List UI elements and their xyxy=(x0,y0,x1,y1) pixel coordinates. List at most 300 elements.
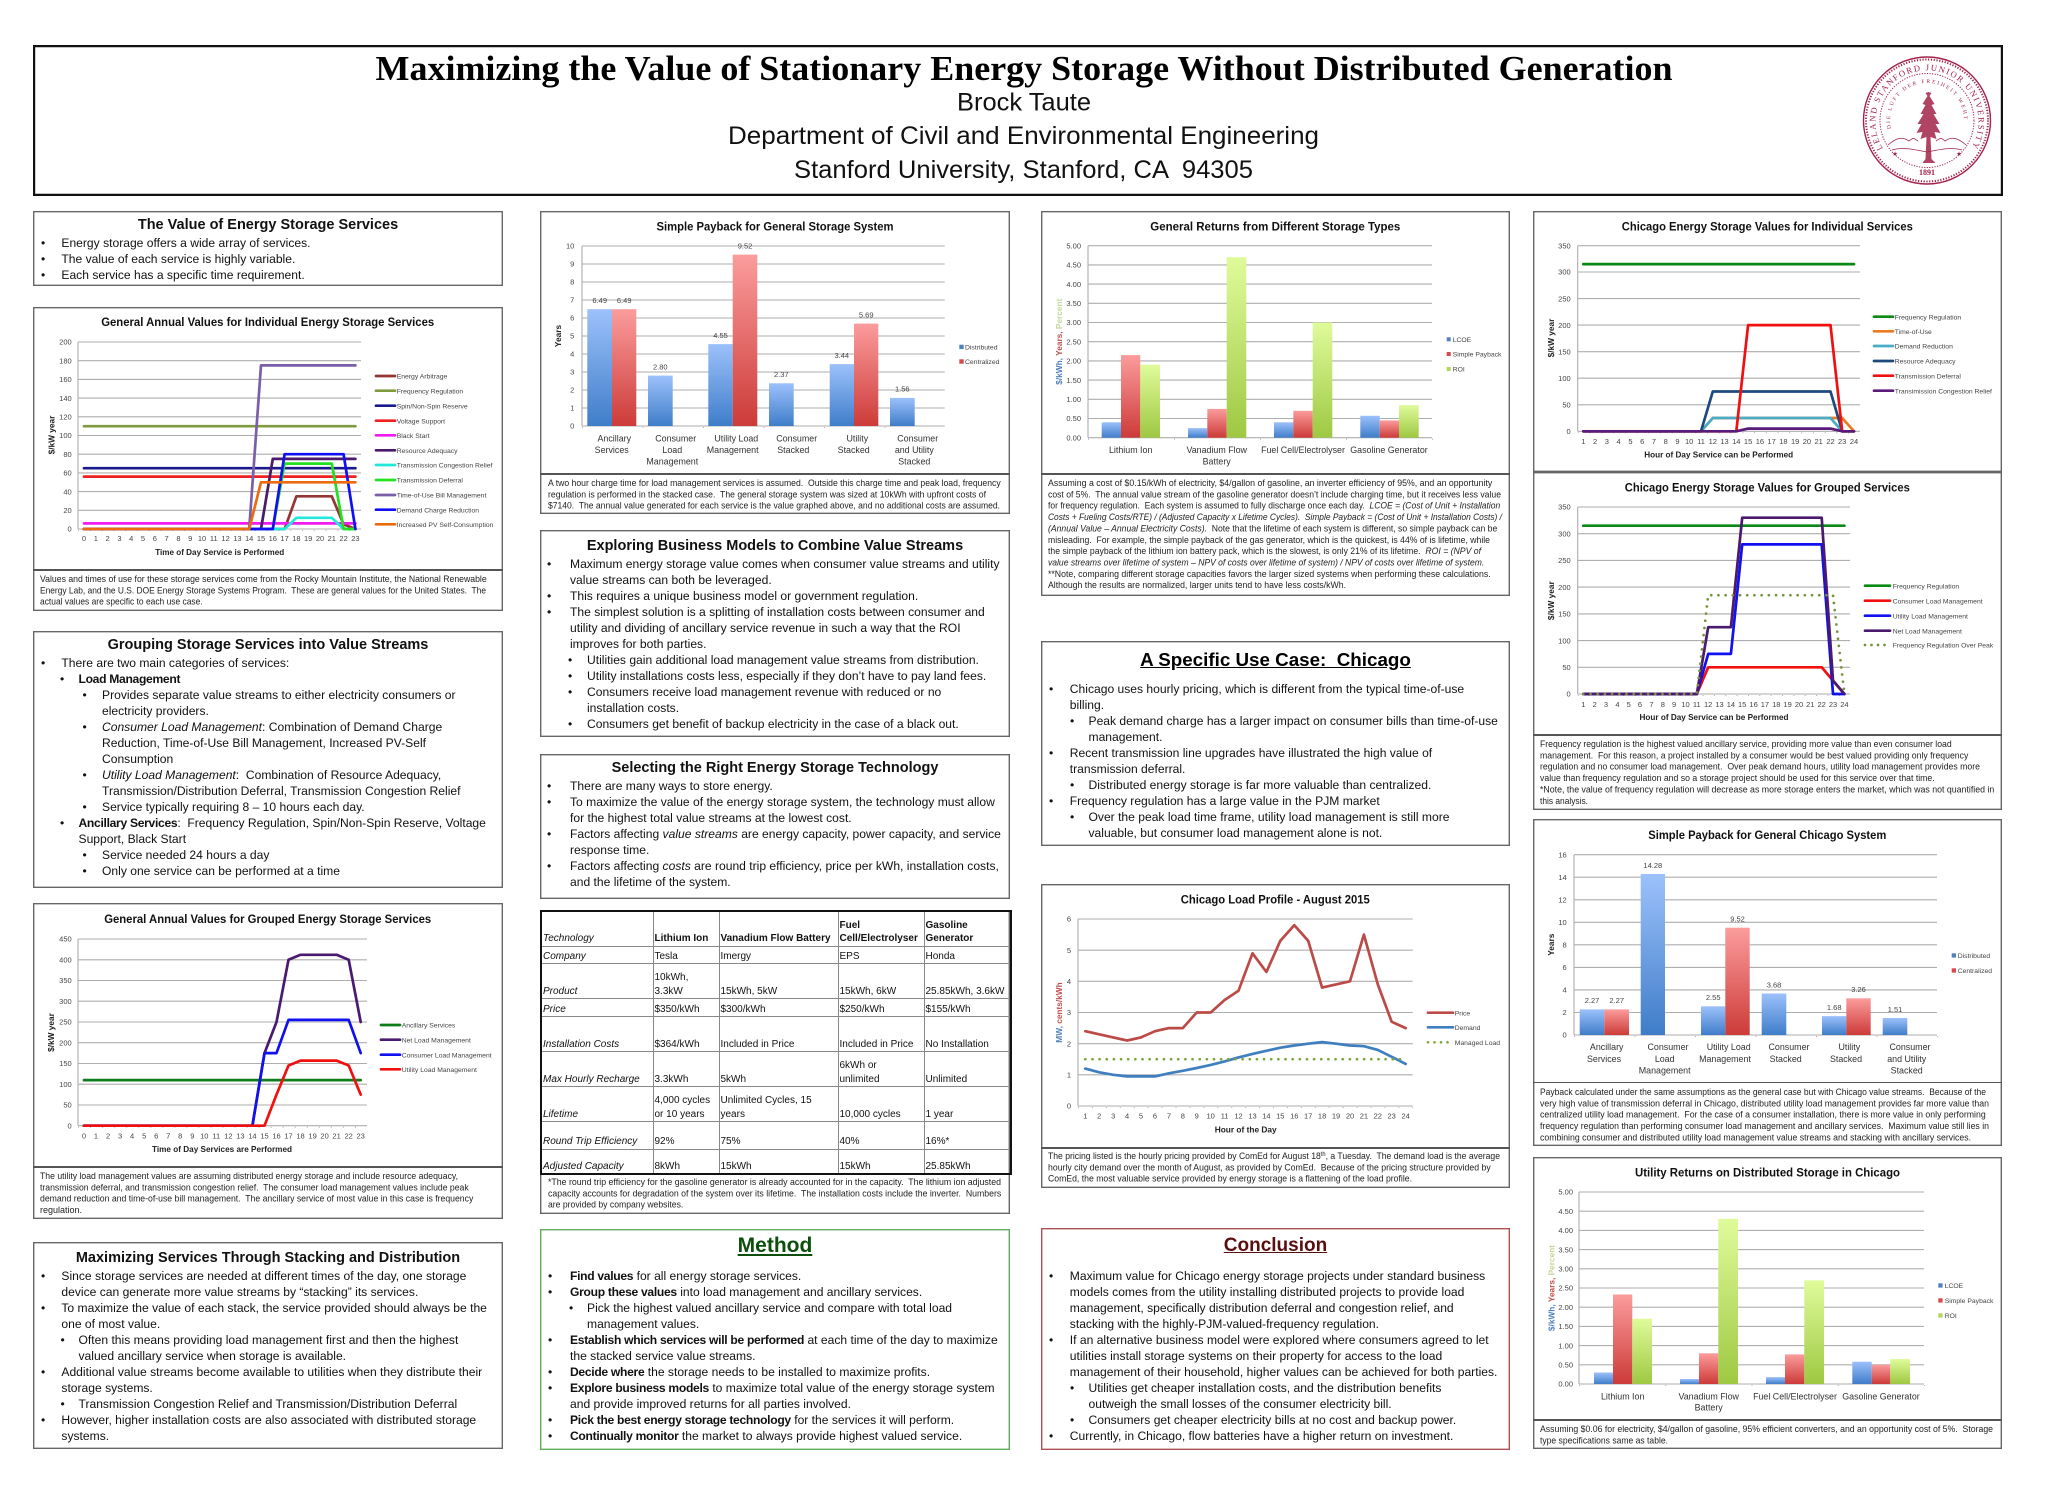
comparison table: $300/kWh xyxy=(720,1004,766,1015)
bullet list: Load Management xyxy=(78,672,180,686)
category labels: Battery xyxy=(1203,457,1231,467)
y axis labels: 9 xyxy=(570,260,574,269)
legend: Demand xyxy=(1455,1025,1481,1032)
category labels: Stacked xyxy=(838,445,870,455)
x axis labels: 21 xyxy=(328,534,336,543)
panel: simple payback for general storage system xyxy=(540,211,1010,514)
legend: Increased PV Self-Consumption xyxy=(397,522,494,529)
method steps xyxy=(548,1269,998,1443)
y axis labels: 140 xyxy=(59,394,72,403)
bars xyxy=(1102,257,1419,438)
y axis labels: 150 xyxy=(1558,347,1571,356)
comparison table: years xyxy=(720,1109,745,1120)
category labels: Services xyxy=(1587,1054,1622,1064)
bullet list xyxy=(1050,1269,1497,1443)
panel: selecting the right technology xyxy=(540,754,1010,898)
caption xyxy=(548,1177,1001,1210)
y axis labels: 100 xyxy=(1558,374,1571,383)
y axis labels: 300 xyxy=(59,997,72,1006)
value labels: 2.27 xyxy=(1585,996,1599,1005)
comparison table: 8kWh xyxy=(654,1161,680,1172)
comparison table xyxy=(540,910,1012,1175)
y axis labels: 3.50 xyxy=(1558,1245,1573,1254)
caption xyxy=(1540,1086,1989,1142)
comparison table: Included in Price xyxy=(720,1039,794,1050)
y axis labels: 150 xyxy=(59,1059,72,1068)
bullet list: and the lifetime of the system. xyxy=(570,875,731,889)
caption: regulation and no consumer load management. Over peak demand hours, utility load management provides more xyxy=(1540,762,1980,772)
legend: Frequency Regulation xyxy=(1895,314,1961,321)
y axis labels: 120 xyxy=(59,412,72,422)
y axis labels: 0 xyxy=(570,422,574,431)
icon: Stanford university seal: 1891 xyxy=(1919,168,1935,177)
header banner xyxy=(33,45,2003,196)
comparison table: Technology xyxy=(543,933,594,944)
value labels: 4.55 xyxy=(713,331,728,340)
legend: Time-of-Use xyxy=(1895,329,1932,336)
y axis labels: 0.00 xyxy=(1066,433,1081,442)
legend xyxy=(959,344,1000,366)
caption: transmission deferral, and transmission congestion relief. The consumer load management values include peak xyxy=(40,1182,469,1192)
bullet list: Utilities get cheaper installation costs, and the distribution benefits xyxy=(1088,1381,1441,1395)
category labels: Vanadium Flow xyxy=(1678,1391,1740,1401)
legend xyxy=(1447,337,1502,374)
y axis labels: 50 xyxy=(1562,400,1571,410)
bars xyxy=(1580,874,1907,1035)
comparison table: No Installation xyxy=(926,1039,989,1050)
legend: Energy Arbitrage xyxy=(397,374,448,381)
bullet list: Consumers receive load management revenue with reduced or no xyxy=(587,685,941,699)
method steps: Explore business models to maximize total value of the energy storage system xyxy=(570,1381,995,1395)
x axis labels: 18 xyxy=(296,1131,305,1140)
y axis title: $/kW year xyxy=(1546,318,1556,357)
comparison table: Lifetime xyxy=(543,1109,578,1120)
y axis labels: 180 xyxy=(59,356,72,365)
x axis labels: 3 xyxy=(117,534,121,543)
legend: Spin/Non-Spin Reserve xyxy=(397,403,468,410)
comparison table: Adjusted Capacity xyxy=(543,1161,624,1172)
bullet list: management. xyxy=(1088,730,1162,744)
x axis labels: 19 xyxy=(1791,437,1799,446)
x axis labels: 13 xyxy=(233,534,242,543)
x axis labels: 22 xyxy=(345,1131,353,1140)
x axis labels: 5 xyxy=(141,534,145,543)
comparison table: 25.85kWh, 3.6kW xyxy=(926,986,1004,997)
bullet list: Transmission/Distribution Deferral, Transmission Congestion Relief xyxy=(102,784,460,798)
bullet list: outweigh the small losses of the consumer electricity bill. xyxy=(1088,1397,1392,1411)
comparison table: 10,000 cycles xyxy=(840,1109,901,1120)
heading: Grouping Storage Services into Value Streams xyxy=(108,637,428,653)
bullet list xyxy=(548,779,1001,889)
legend: Net Load Management xyxy=(402,1037,471,1044)
bullet list: for the highest total value streams at the lowest cost. xyxy=(570,811,852,825)
bullet list: Consumers get cheaper electricity bills at no cost and backup power. xyxy=(1088,1413,1456,1427)
bar chart xyxy=(553,222,1000,467)
y axis labels: 12 xyxy=(1558,896,1567,904)
x axis labels: 1 xyxy=(1581,700,1585,709)
bars xyxy=(587,255,915,426)
x axis labels: 13 xyxy=(1715,700,1724,709)
x axis labels: 17 xyxy=(284,1131,293,1140)
x axis labels: 22 xyxy=(1818,700,1826,709)
x axis labels: 20 xyxy=(1346,1112,1354,1120)
legend: Demand Reduction xyxy=(1895,344,1953,351)
x axis labels: 10 xyxy=(200,1131,208,1140)
x axis labels: 11 xyxy=(1221,1112,1228,1120)
x axis labels: 15 xyxy=(260,1131,269,1140)
bar chart xyxy=(1546,830,1992,1076)
bullet list: Maximum energy storage value comes when consumer value streams and utility xyxy=(570,557,1000,571)
value labels: 1.51 xyxy=(1888,1005,1902,1014)
category labels: Utility xyxy=(846,434,869,444)
x axis labels: 18 xyxy=(1779,437,1788,446)
x axis title: Hour of the Day xyxy=(1215,1124,1277,1134)
x axis labels: 3 xyxy=(1604,700,1608,709)
comparison table: Max Hourly Recharge xyxy=(543,1074,640,1085)
x axis labels: 4 xyxy=(129,534,133,543)
comparison table: 15kWh xyxy=(720,1161,752,1172)
chart title: Utility Returns on Distributed Storage in Chicago xyxy=(1635,1167,1900,1179)
panel: a specific use case Chicago xyxy=(1041,641,1510,846)
x axis labels: 5 xyxy=(1627,700,1631,709)
comparison table: Product xyxy=(543,986,577,997)
x axis labels: 20 xyxy=(1803,437,1811,446)
x axis title: Hour of Day Service can be Performed xyxy=(1644,450,1793,460)
bullet list: Factors affecting value streams are energy capacity, power capacity, and service xyxy=(570,827,1001,841)
x axis labels: 19 xyxy=(308,1131,317,1140)
bullet list xyxy=(42,236,311,282)
legend: Ancillary Services xyxy=(402,1023,456,1030)
category labels: Services xyxy=(595,445,629,455)
comparison table: $250/kWh xyxy=(840,1004,885,1015)
bullet list: If an alternative business model were explored where consumers agreed to let xyxy=(1070,1333,1489,1347)
panel: grouping storage services xyxy=(33,631,503,888)
y axis labels: 150 xyxy=(1558,610,1571,619)
category labels: Utility xyxy=(1838,1042,1861,1052)
comparison table: $350/kWh xyxy=(654,1004,700,1015)
y axis labels: 4 xyxy=(570,350,574,359)
x axis labels: 21 xyxy=(332,1131,341,1140)
data series xyxy=(1583,264,1854,431)
bullet list: Factors affecting costs are round trip efficiency, price per kWh, installation costs, xyxy=(570,859,999,873)
bullet list: To maximize the value of the energy storage system, the technology must allow xyxy=(570,795,995,809)
panel: general returns from storage types xyxy=(1041,211,1510,596)
x axis labels: 13 xyxy=(1720,437,1729,446)
comparison table: 4,000 cycles xyxy=(654,1095,710,1106)
x axis labels: 7 xyxy=(1167,1112,1171,1120)
caption: Payback calculated under the same assumptions as the general case but with Chicago value streams. Because of the xyxy=(1540,1086,1986,1096)
x axis labels: 5 xyxy=(1139,1112,1143,1120)
x axis labels: 2 xyxy=(1097,1112,1101,1120)
comparison table: or 10 years xyxy=(654,1109,705,1120)
category labels: Vanadium Flow xyxy=(1186,445,1248,455)
legend: ROI xyxy=(1945,1313,1957,1320)
panel: exploring business models xyxy=(540,530,1010,737)
y axis labels: 300 xyxy=(1558,529,1571,538)
legend: Distributed xyxy=(1958,953,1990,960)
x axis labels: 2 xyxy=(106,1131,110,1140)
x axis labels: 23 xyxy=(1829,700,1837,709)
y axis labels: 4.50 xyxy=(1558,1207,1573,1216)
x axis labels: 23 xyxy=(1388,1112,1396,1120)
y axis labels: 200 xyxy=(1558,321,1571,330)
chart title: General Returns from Different Storage Types xyxy=(1150,222,1400,234)
x axis labels: 16 xyxy=(1749,700,1758,709)
y axis labels: 0.50 xyxy=(1558,1360,1573,1370)
heading: Method xyxy=(738,1234,812,1257)
x axis labels: 2 xyxy=(1593,700,1597,709)
x axis labels: 6 xyxy=(1153,1112,1157,1120)
bullet list: To maximize the value of each stack, the service provided should always be the xyxy=(61,1301,487,1315)
y axis labels: 5.00 xyxy=(1066,241,1081,250)
category labels: Stacked xyxy=(777,445,809,455)
x axis labels: 7 xyxy=(1652,437,1656,446)
x axis labels: 1 xyxy=(1083,1112,1087,1120)
y axis labels: 1.00 xyxy=(1066,395,1081,404)
x axis labels: 3 xyxy=(1605,437,1609,446)
comparison table: $155/kWh xyxy=(926,1004,971,1015)
y axis labels: 200 xyxy=(1558,583,1571,592)
x axis labels: 18 xyxy=(1318,1112,1326,1120)
comparison table: Honda xyxy=(926,951,955,962)
comparison table: Vanadium Flow Battery xyxy=(720,933,831,944)
x axis labels: 8 xyxy=(176,534,180,543)
category labels: Utility Load xyxy=(1707,1042,1751,1052)
caption: type specifications same as table. xyxy=(1540,1435,1668,1445)
comparison table: Unlimited Cycles, 15 xyxy=(720,1095,812,1106)
value labels: 6.49 xyxy=(617,296,632,305)
category labels: Ancillary xyxy=(598,434,632,444)
bullet list: Recent transmission line upgrades have illustrated the high value of xyxy=(1070,746,1432,760)
x axis labels: 9 xyxy=(1195,1112,1199,1120)
panel: Chicago grouped services xyxy=(1533,472,2002,810)
x axis labels: 3 xyxy=(1111,1112,1115,1120)
legend xyxy=(376,374,494,529)
y axis labels: 40 xyxy=(63,487,72,496)
y axis labels: 2 xyxy=(1067,1039,1071,1048)
x axis labels: 12 xyxy=(1709,437,1717,446)
caption xyxy=(1540,1424,1993,1446)
y axis title: $/kWh, Years, Percent xyxy=(1546,1245,1556,1331)
method steps: Establish which services will be performed at each time of the day to maximize xyxy=(570,1333,998,1347)
x axis labels: 6 xyxy=(1638,700,1642,709)
y axis title: Years xyxy=(553,325,563,347)
category labels: Load xyxy=(662,445,682,455)
y axis labels: 60 xyxy=(63,469,72,478)
comparison table: 15kWh, 5kW xyxy=(720,986,777,997)
caption: regulation is performed in the stacked case. The general storage system was sized at 10kWh with upfront costs of xyxy=(548,489,986,499)
comparison table: 25.85kWh xyxy=(926,1161,971,1172)
comparison table: Generator xyxy=(926,933,973,944)
legend: Frequency Regulation xyxy=(397,388,463,395)
caption: Although the results are normalized, larger units tend to have less costs/kWh. xyxy=(1048,580,1346,590)
legend: Consumer Load Management xyxy=(402,1052,492,1059)
x axis labels: 11 xyxy=(1697,437,1705,446)
caption: **Note, comparing different storage capacities favors the larger sized systems when performing these calculations. xyxy=(1048,569,1491,579)
category labels: Lithium Ion xyxy=(1601,1391,1644,1401)
caption: are provided by company websites. xyxy=(548,1200,683,1210)
bullet list: Chicago uses hourly pricing, which is different from the typical time-of-use xyxy=(1070,682,1464,696)
category labels: Battery xyxy=(1695,1403,1723,1413)
panel: storage technology table xyxy=(540,910,1010,1214)
legend: Transmission Congestion Relief xyxy=(397,463,493,470)
legend xyxy=(1952,953,1992,975)
comparison table: Company xyxy=(543,951,586,962)
x axis labels: 1 xyxy=(94,534,98,543)
x axis labels: 5 xyxy=(142,1131,146,1140)
category labels: Consumer xyxy=(897,434,938,444)
x axis labels: 14 xyxy=(1732,437,1740,446)
y axis labels: 7 xyxy=(570,296,574,305)
chart title: Simple Payback for General Storage System xyxy=(656,222,894,234)
method steps: Decide where the storage needs to be installed to maximize profits. xyxy=(570,1365,930,1379)
x axis labels: 11 xyxy=(210,534,218,543)
bullet list: Utility Load Management: Combination of Resource Adequacy, xyxy=(102,768,441,782)
comparison table: 92% xyxy=(654,1136,675,1147)
bullet list: valuable, but consumer load management alone is not. xyxy=(1088,826,1382,840)
y axis labels: 6 xyxy=(1563,963,1567,972)
category labels: and Utility xyxy=(1887,1054,1927,1064)
x axis labels: 0 xyxy=(82,534,86,543)
x axis labels: 12 xyxy=(1234,1112,1243,1120)
y axis labels: 250 xyxy=(1558,556,1571,565)
panel: Chicago load profile xyxy=(1041,884,1510,1188)
bullet list: The simplest solution is a splitting of installation costs between consumer and xyxy=(570,605,985,619)
x axis labels: 16 xyxy=(1756,437,1764,446)
comparison table: 75% xyxy=(720,1136,741,1147)
y axis labels: 8 xyxy=(1563,940,1567,950)
comparison table: 5kWh xyxy=(720,1074,746,1085)
bullet list: Support, Black Start xyxy=(78,832,186,846)
comparison table: Tesla xyxy=(654,951,678,962)
y axis labels: 3 xyxy=(1067,1008,1071,1017)
y axis labels: 5 xyxy=(1067,946,1071,955)
method steps: management values. xyxy=(587,1317,699,1331)
bullet list: electricity providers. xyxy=(102,704,209,718)
x axis labels: 24 xyxy=(1402,1112,1410,1120)
x axis labels: 0 xyxy=(82,1131,86,1140)
comparison table: 1 year xyxy=(926,1109,953,1120)
y axis labels: 50 xyxy=(1562,663,1571,672)
x axis labels: 3 xyxy=(118,1131,122,1140)
x axis labels: 10 xyxy=(1681,700,1690,709)
x axis labels: 23 xyxy=(357,1131,365,1140)
x axis labels: 9 xyxy=(1672,700,1676,709)
caption: actual values are specific to each use case. xyxy=(40,597,203,607)
heading: Exploring Business Models to Combine Value Streams xyxy=(587,538,963,554)
category labels: Consumer xyxy=(776,434,817,444)
y axis labels: 200 xyxy=(59,338,72,347)
x axis labels: 22 xyxy=(1826,437,1835,446)
x axis labels: 5 xyxy=(1628,437,1632,446)
bullet list: Distributed energy storage is far more valuable than centralized. xyxy=(1088,778,1431,792)
x axis labels: 14 xyxy=(1727,700,1735,709)
y axis labels: 1.50 xyxy=(1066,376,1081,385)
bullet list: Provides separate value streams to either electricity consumers or xyxy=(102,688,456,702)
value labels: 3.26 xyxy=(1851,985,1866,994)
bullet list: Utility installations costs less, especially if they don’t have to pay land fees. xyxy=(587,669,986,683)
x axis labels: 14 xyxy=(1262,1112,1271,1120)
bullet list xyxy=(42,1269,487,1443)
value labels: 1.68 xyxy=(1827,1003,1842,1012)
comparison table: Included in Price xyxy=(840,1039,913,1050)
category labels: Utility Load xyxy=(714,434,758,444)
y axis labels: 1.00 xyxy=(1558,1341,1573,1350)
value labels: 2.37 xyxy=(774,370,789,379)
x axis labels: 20 xyxy=(320,1131,329,1140)
legend xyxy=(381,1023,492,1074)
x axis labels: 19 xyxy=(1332,1112,1340,1120)
caption: $7140. The annual value generated for each service is the value graphed above, and no additional costs are assumed. xyxy=(548,501,1000,511)
x axis labels: 18 xyxy=(1772,700,1780,709)
x axis labels: 8 xyxy=(1181,1112,1185,1120)
icon: Stanford university seal: LELAND STANFORD JUNIOR UNIVERSITY xyxy=(1870,64,1984,152)
y axis labels: 6 xyxy=(1067,915,1071,924)
value labels: 3.68 xyxy=(1767,980,1781,989)
y axis title: $/kW year xyxy=(46,1012,56,1052)
bullet list: Reduction, Time-of-Use Bill Management, Increased PV-Self xyxy=(102,736,426,750)
comparison table: 15kWh xyxy=(840,1161,871,1172)
caption: hourly city demand over the month of August, as provided by ComEd. Because of the pricing structure provided by xyxy=(1048,1163,1491,1173)
x axis labels: 20 xyxy=(316,534,324,543)
caption: combining consumer and distributed utility load management value streams and stacking with ancillary services. xyxy=(1540,1132,1971,1142)
department: Department of Civil and Environmental Engineering xyxy=(728,122,1319,150)
y axis labels: 0 xyxy=(1567,427,1571,436)
x axis labels: 9 xyxy=(190,1131,194,1140)
x axis labels: 16 xyxy=(269,534,277,543)
y axis title: $/kW year xyxy=(46,415,56,454)
x axis labels: 11 xyxy=(1693,700,1701,709)
caption: (Annual Value – Annual Electricity Costs). Note that the lifetime of each system is different, so simple payback can be xyxy=(1048,524,1497,534)
x axis labels: 1 xyxy=(1581,437,1585,446)
x axis labels: 2 xyxy=(1593,437,1597,446)
comparison table: Gasoline xyxy=(926,920,968,931)
bullet list: Peak demand charge has a larger impact on consumer bills than time-of-use xyxy=(1088,714,1498,728)
value labels: 1.56 xyxy=(895,385,910,394)
method steps: the stacked service value streams. xyxy=(570,1349,756,1363)
university: Stanford University, Stanford, CA 94305 xyxy=(794,156,1253,184)
x axis labels: 13 xyxy=(1248,1112,1257,1120)
legend: LCOE xyxy=(1945,1283,1964,1290)
bar chart xyxy=(1054,222,1502,467)
y axis labels: 10 xyxy=(566,242,574,251)
y axis labels: 50 xyxy=(63,1101,72,1110)
x axis labels: 12 xyxy=(1704,700,1712,709)
y axis labels: 300 xyxy=(1558,268,1571,277)
x axis labels: 9 xyxy=(188,534,192,543)
comparison table: Installation Costs xyxy=(543,1039,619,1050)
comparison table: Cell/Electrolyser xyxy=(840,933,918,944)
legend: LCOE xyxy=(1453,337,1472,344)
legend: Demand Charge Reduction xyxy=(397,507,479,514)
caption: the simple payback of the lithium ion battery pack, which is the slowest, is only 21% of its lifetime. ROI = (NPV of xyxy=(1048,546,1482,556)
legend: Price xyxy=(1455,1010,1470,1017)
comparison table: unlimited xyxy=(840,1074,880,1085)
comparison table: Lithium Ion xyxy=(654,933,708,944)
bullet list: Service needed 24 hours a day xyxy=(102,848,269,862)
line chart xyxy=(1546,482,1994,722)
caption: demand reduction and time-of-use bill management. The ancillary service of most value in this case is frequency xyxy=(40,1194,474,1204)
x axis labels: 23 xyxy=(1838,437,1846,446)
bullet list: Consumer Load Management: Combination of Demand Charge xyxy=(102,720,442,734)
comparison table: $364/kWh xyxy=(654,1039,700,1050)
y axis labels: 350 xyxy=(1558,503,1571,512)
x axis labels: 24 xyxy=(1850,437,1858,446)
x axis labels: 16 xyxy=(272,1131,281,1140)
x axis title: Hour of Day Service can be Performed xyxy=(1640,712,1788,722)
value labels: 2.55 xyxy=(1706,993,1721,1002)
caption: very high value of transmission deferral in Chicago, distributed utility load management provides far more value than xyxy=(1540,1098,1989,1108)
